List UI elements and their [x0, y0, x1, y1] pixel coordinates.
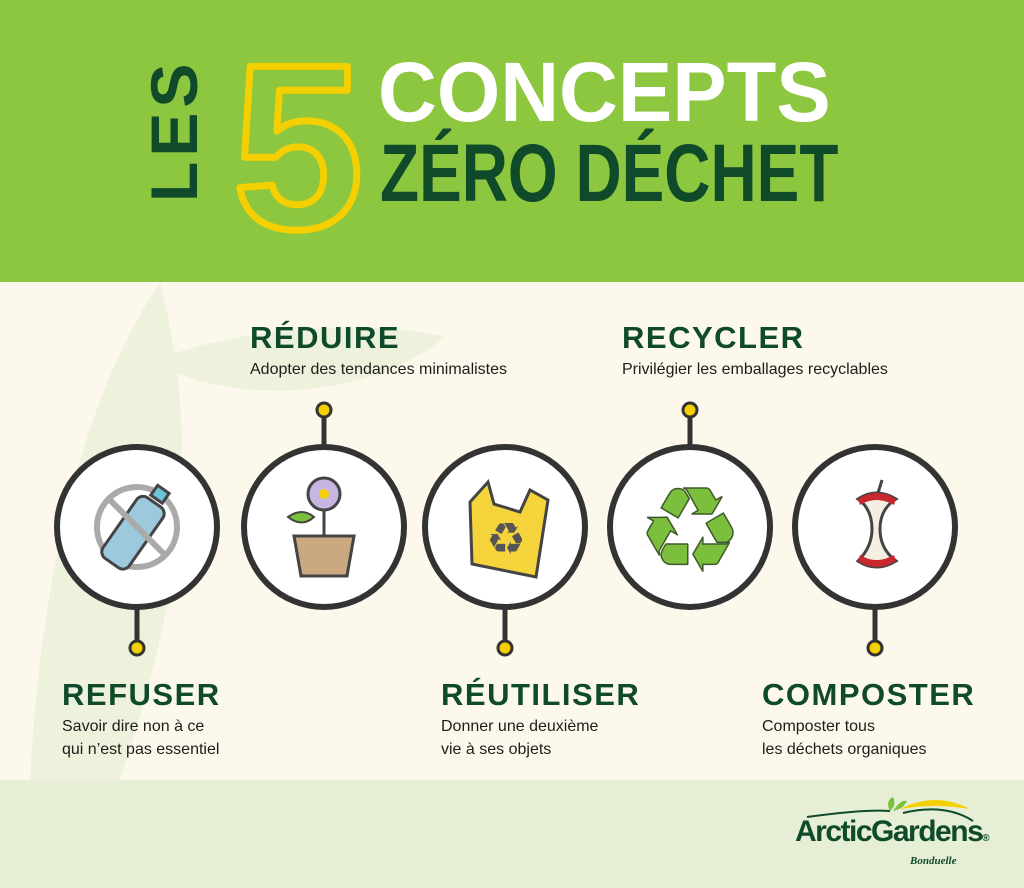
block: RÉDUIRE: [250, 320, 507, 378]
block: RÉDUIRE: RÉDUIRE: [250, 320, 400, 355]
block: RÉUTILISER: Donner une deuxième: [441, 718, 598, 735]
title: CONCEPTS: CONCEPTS: [378, 45, 831, 139]
block: REFUSER: REFUSER: [62, 677, 221, 712]
block: RÉUTILISER: vie à ses objets: [441, 741, 551, 758]
block: COMPOSTER: COMPOSTER: [762, 677, 975, 712]
title: ZÉRO DÉCHET: ZÉRO DÉCHET: [380, 128, 838, 219]
logo: Arctic Gardens: Bonduelle: [910, 855, 956, 867]
icon: flower pot: [286, 476, 356, 578]
block: RECYCLER: [622, 320, 888, 378]
block: RECYCLER: RECYCLER: [622, 320, 805, 355]
block: COMPOSTER: les déchets organiques: [762, 741, 927, 758]
block: REFUSER: Savoir dire non à ce: [62, 718, 204, 735]
icon: bottle forbidden: [94, 483, 180, 571]
logo: Arctic Gardens: [795, 797, 990, 867]
block: REFUSER: qui n’est pas essentiel: [62, 741, 219, 758]
bottom band: [0, 780, 1024, 888]
logo: Arctic Gardens: ArcticGardens®: [795, 815, 988, 848]
block: RECYCLER: Privilégier les emballages recyclables: [622, 361, 888, 378]
block: RÉUTILISER: [441, 677, 640, 758]
header band: [0, 0, 1024, 282]
decorative leaves: [30, 282, 444, 780]
block: RÉDUIRE: Adopter des tendances minimalistes: [250, 361, 507, 378]
block: RÉUTILISER: RÉUTILISER: [441, 677, 640, 712]
block: COMPOSTER: Composter tous: [762, 718, 875, 735]
title: LES: LES: [137, 59, 211, 202]
icon: recycled bag: ♻: [486, 514, 526, 565]
icon: recycled bag: [468, 479, 550, 579]
block: COMPOSTER: [762, 677, 975, 758]
block: REFUSER: [62, 677, 221, 758]
icon: apple core: [856, 480, 899, 568]
